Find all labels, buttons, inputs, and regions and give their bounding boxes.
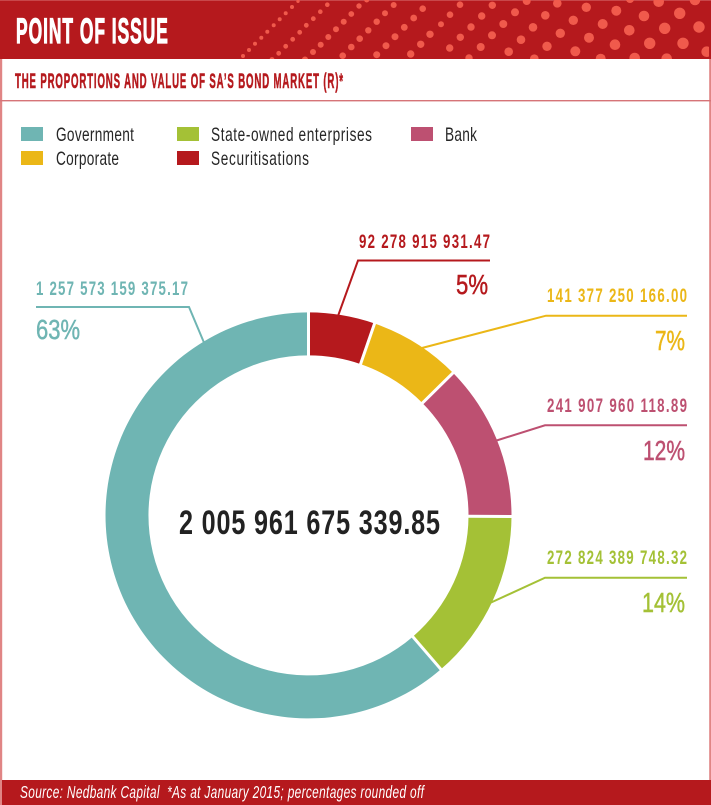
callout: Securitisations [338, 230, 490, 316]
donut chart [106, 310, 514, 718]
segment: Bank 12% [422, 373, 512, 516]
total value: 2 005 961 675 339.85 [179, 504, 440, 542]
callout: Government: 63% [36, 314, 80, 345]
legend item: Securitisations: Securitisations [211, 148, 309, 170]
callout: Government [36, 277, 205, 345]
callout: State-owned enterprises: 272 824 389 748.32 [547, 546, 687, 569]
callout: State-owned enterprises: 14% [642, 587, 685, 618]
callout: Bank: 12% [643, 435, 685, 466]
legend item: Government: Government [56, 124, 134, 146]
legend item: Corporate [21, 148, 119, 170]
callout: Bank: 241 907 960 118.89 [547, 394, 687, 417]
segment: Government 63% [106, 312, 441, 718]
callout: Securitisations: 5% [456, 269, 488, 300]
callout: Bank [495, 394, 687, 466]
footer bar: Source: Nedbank Capital *As at January 2015; percentages rounded off [20, 783, 425, 803]
subtitle: THE PROPORTIONS AND VALUE OF SA’S BOND MARKET (R)* [15, 69, 343, 93]
segment: Securitisations 5% [308, 312, 375, 364]
callout: Corporate [420, 284, 687, 356]
callout: Corporate: 141 377 250 166.00 [547, 284, 687, 307]
footer bar [2, 780, 711, 805]
callout: Corporate: 7% [655, 325, 685, 356]
segment: Corporate 7% [361, 324, 453, 403]
legend [21, 124, 477, 170]
legend item: Government [21, 124, 134, 146]
legend item: State-owned enterprises: State-owned enterprises [211, 124, 372, 146]
callout: State-owned enterprises [490, 546, 687, 618]
legend item: Corporate: Corporate [56, 148, 119, 170]
legend item: Bank: Bank [445, 124, 477, 146]
title: POINT OF ISSUE [16, 11, 168, 51]
callout: Government: 1 257 573 159 375.17 [36, 277, 188, 300]
legend item: Bank [411, 124, 477, 146]
callout: Securitisations: 92 278 915 931.47 [359, 230, 490, 253]
segment: State-owned enterprises 14% [413, 516, 512, 669]
header banner [0, 0, 711, 64]
